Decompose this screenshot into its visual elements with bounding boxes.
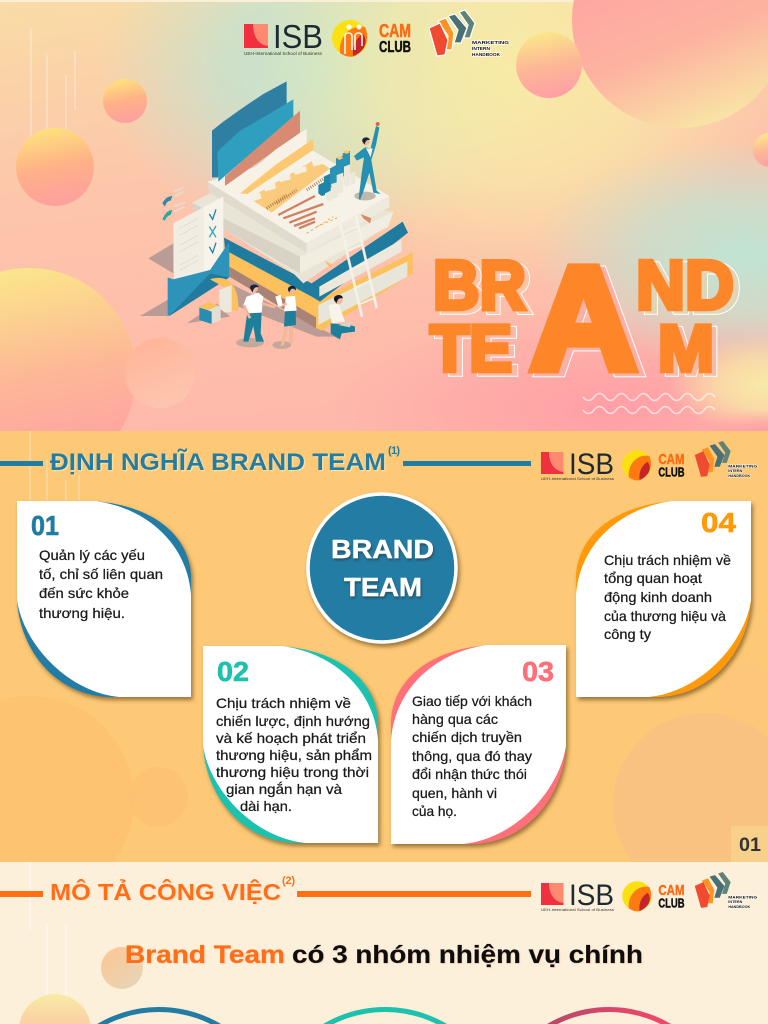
person: seated with laptop — [329, 295, 355, 339]
logo: ISB: UEH-International School of Business — [541, 477, 614, 481]
top logos — [244, 10, 509, 58]
card 04: động kinh doanh — [604, 589, 712, 605]
card 04: 04 — [701, 507, 736, 538]
logo: ISB: ISB — [569, 448, 614, 481]
logo: Cam Club: CAM — [658, 883, 685, 899]
card 01 — [17, 501, 191, 697]
card 01: 01 — [31, 510, 59, 541]
arc: blue circle top — [80, 1010, 238, 1024]
3D columns — [318, 150, 355, 202]
title inner fill of the outline — [435, 262, 739, 376]
title inner fill of the outline: M — [663, 314, 719, 388]
logo: Cam Club: CAM — [658, 452, 685, 468]
logo: Cam Club: CLUB — [658, 895, 685, 910]
person: woman — [272, 286, 297, 349]
logo: ISB: UEH-International School of Business — [541, 908, 614, 912]
title white offset outline — [434, 261, 740, 378]
logo: Marketing Intern Handbook: MARKETING — [472, 40, 509, 46]
logo: Cam Club — [332, 20, 411, 57]
top book — [207, 150, 389, 253]
decorative circles — [0, 665, 768, 904]
card 01: tố, chỉ số liên quan — [39, 566, 163, 582]
card 02: thương hiệu trong thời — [216, 764, 369, 780]
illustration: stack of books with charts and people — [140, 81, 413, 349]
title solid letters: ND — [636, 246, 734, 324]
logo: Marketing Intern Handbook: HANDBOOK — [472, 52, 501, 58]
logo: Cam Club: CAM — [379, 21, 411, 41]
card 03: đổi nhận thức thói — [412, 766, 527, 782]
panel: definition of Brand Team — [0, 431, 768, 904]
logo: ISB — [244, 24, 322, 55]
logo: Cam Club — [622, 881, 685, 911]
card 03: 03 — [522, 656, 554, 687]
logo: Marketing Intern Handbook: INTERN — [728, 900, 743, 904]
title white offset outline: A — [536, 240, 643, 404]
title solid letters: A — [530, 237, 637, 401]
center circle: Brand Team: BRAND — [331, 536, 434, 564]
data panel with bars — [248, 157, 340, 233]
logo: Marketing Intern Handbook: MARKETING — [728, 896, 757, 900]
card 01: Quản lý các yếu — [39, 547, 145, 563]
title inner fill of the outline: TE — [436, 314, 518, 388]
card 02: và kế hoạch phát triển — [216, 730, 366, 746]
title: BRAND TEAM — [428, 258, 740, 378]
title white offset outline: M — [663, 314, 719, 388]
logo: Marketing Intern Handbook: MARKETING — [728, 465, 757, 469]
subheading: có 3 nhóm nhiệm vụ chính — [292, 941, 643, 969]
section logos — [541, 872, 757, 912]
logo: Marketing Intern Handbook — [429, 10, 509, 58]
arc: pink circle top — [530, 1010, 688, 1024]
card 01: đến sức khỏe — [39, 585, 129, 601]
white book — [192, 193, 393, 283]
chart blocks — [199, 278, 238, 324]
logo: Marketing Intern Handbook: INTERN — [728, 469, 743, 473]
card 03: thông, qua đó thay — [412, 748, 532, 764]
card 04 — [576, 501, 751, 697]
arc: teal circle top — [306, 1010, 464, 1024]
heading: definition: (1) — [388, 445, 400, 457]
card 03: quen, hành vi — [412, 785, 497, 801]
logo: ISB: UEH-International School of Business — [244, 51, 323, 56]
title solid letters: BR — [433, 246, 526, 324]
page number badge: 01 — [739, 835, 761, 856]
card 03: của họ. — [412, 803, 457, 819]
card 04: Chịu trách nhiệm về — [604, 552, 731, 568]
card 04: tổng quan hoạt — [604, 570, 702, 586]
title solid letters: M — [658, 311, 714, 385]
heading: job description: (2) — [282, 875, 295, 887]
person on top — [354, 122, 381, 200]
bottom yellow book — [229, 252, 413, 331]
card 03: chiến dịch truyền — [412, 729, 522, 745]
title inner fill of the outline: ND — [642, 249, 740, 327]
checklist and envelope — [162, 187, 229, 316]
logo: ISB: ISB — [569, 879, 614, 912]
ground shadows — [140, 243, 337, 337]
center circle: Brand Team — [308, 494, 456, 642]
title solid letters: TE — [430, 311, 512, 385]
blue book — [224, 222, 408, 302]
bookmark tags — [325, 214, 371, 267]
title solid letters — [428, 258, 734, 374]
card 02: dài hạn. — [240, 798, 292, 814]
title inner fill of the outline: BR — [438, 249, 531, 327]
person: man in white — [236, 284, 275, 347]
logo: Marketing Intern Handbook — [695, 441, 757, 478]
card 02: gian ngắn hạn và — [226, 781, 342, 797]
card 03 — [391, 645, 566, 844]
heading: definition — [0, 445, 531, 476]
logo: Marketing Intern Handbook: HANDBOOK — [728, 474, 750, 478]
decorative circles — [19, 947, 143, 1024]
logo: Cam Club: CLUB — [379, 39, 411, 56]
card 03: hàng qua các — [412, 711, 498, 727]
card 02: chiến lược, định hướng — [216, 713, 370, 729]
title inner fill of the outline: A — [536, 240, 643, 404]
logo: ISB — [541, 879, 614, 912]
card 03: Giao tiếp với khách — [412, 693, 532, 709]
decorative circles — [0, 0, 768, 431]
ladder — [339, 212, 377, 317]
subheading: Brand Team — [125, 941, 285, 969]
card 04: của thương hiệu và — [604, 608, 726, 624]
card 02 — [203, 646, 378, 843]
heading: job description — [0, 875, 531, 905]
logo: ISB — [541, 452, 614, 480]
heading: definition: ĐỊNH NGHĨA BRAND TEAM — [50, 448, 386, 476]
heading: job description: MÔ TẢ CÔNG VIỆC — [50, 877, 281, 905]
center circle: Brand Team: TEAM — [344, 574, 422, 602]
logo: Marketing Intern Handbook: HANDBOOK — [728, 905, 750, 909]
logo: Cam Club: CLUB — [658, 464, 685, 479]
area charts — [212, 81, 313, 194]
title white offset outline: BR — [438, 249, 531, 327]
card 02: thương hiệu, sản phẩm — [216, 747, 372, 763]
title white offset outline: TE — [436, 314, 518, 388]
section logos — [541, 441, 757, 481]
card 02: 02 — [217, 656, 249, 687]
card 04: công ty — [604, 626, 651, 642]
panel: hero — [0, 0, 768, 431]
page number badge — [731, 826, 768, 862]
panel: job description — [0, 862, 768, 1024]
title white offset outline: ND — [642, 249, 740, 327]
logo: Cam Club — [622, 450, 685, 480]
card 02: Chịu trách nhiệm về — [216, 695, 351, 711]
card 01: thương hiệu. — [39, 605, 125, 621]
logo: Marketing Intern Handbook: INTERN — [472, 46, 491, 52]
logo: Marketing Intern Handbook — [695, 872, 757, 909]
logo: ISB: ISB — [273, 18, 323, 55]
subheading — [125, 941, 643, 969]
decorative waves — [583, 394, 715, 414]
